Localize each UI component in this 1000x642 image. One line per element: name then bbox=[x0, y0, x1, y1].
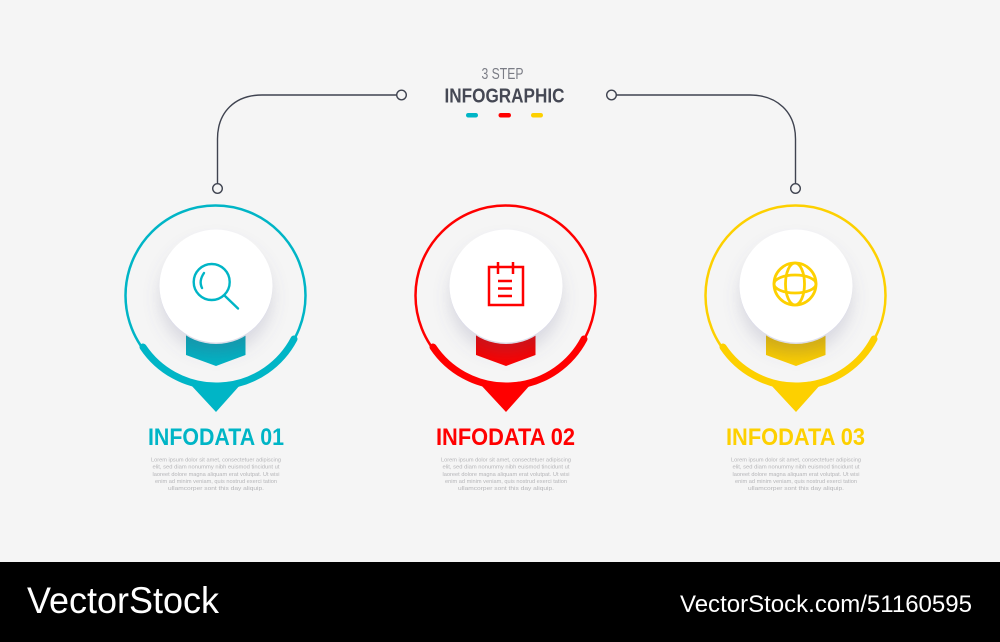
icon: notepad bbox=[489, 262, 523, 305]
title line: 3 step: 3 STEP bbox=[482, 66, 524, 83]
connector: right bbox=[607, 90, 800, 193]
ring bbox=[706, 206, 886, 386]
body text: elit, sed diam nonummy nibh euismod tincidunt ut bbox=[732, 464, 860, 470]
heading: INFODATA 03 bbox=[726, 424, 865, 451]
body text: enim ad minim veniam, quis nostrud exerci tation bbox=[735, 479, 857, 485]
heading: INFODATA 01 bbox=[148, 424, 284, 451]
footer id text: VectorStock.com/51160595 bbox=[680, 591, 972, 618]
ribbon bbox=[766, 335, 826, 366]
footer bar bbox=[0, 562, 1000, 642]
body text: Lorem ipsum dolor sit amet, consectetuer adipiscing bbox=[731, 458, 861, 464]
title colour dashes bbox=[466, 113, 543, 118]
body text: elit, sed diam nonummy nibh euismod tincidunt ut bbox=[152, 464, 280, 470]
thick arc bbox=[723, 339, 874, 386]
ribbon bbox=[186, 335, 246, 366]
body text: Lorem ipsum dolor sit amet, consectetuer adipiscing bbox=[441, 458, 571, 464]
footer logo text: VectorStock bbox=[27, 580, 219, 621]
pointer bbox=[480, 384, 531, 412]
thick arc bbox=[433, 339, 584, 386]
body text: Lorem ipsum dolor sit amet, consectetuer adipiscing bbox=[151, 458, 281, 464]
body text: elit, sed diam nonummy nibh euismod tincidunt ut bbox=[442, 464, 570, 470]
white disc bbox=[740, 231, 852, 344]
white disc bbox=[450, 231, 562, 344]
pointer bbox=[190, 384, 241, 412]
thick arc bbox=[143, 339, 294, 386]
pointer bbox=[770, 384, 821, 412]
white disc face bbox=[450, 230, 562, 342]
icon: magnifier bbox=[194, 264, 238, 308]
step 2 bbox=[416, 206, 596, 492]
body text bbox=[151, 458, 281, 492]
ring bbox=[416, 206, 596, 386]
step 3 bbox=[706, 206, 886, 492]
body text: ullamcorper sont this day aliquip. bbox=[748, 486, 844, 492]
heading: INFODATA 02 bbox=[436, 424, 575, 451]
body text: laoreet dolore magna aliquam erat volutpat. Ut wisi bbox=[732, 472, 860, 478]
body text: laoreet dolore magna aliquam erat volutpat. Ut wisi bbox=[442, 472, 570, 478]
body text: enim ad minim veniam, quis nostrud exerci tation bbox=[445, 479, 567, 485]
body text bbox=[731, 458, 861, 492]
step 1 bbox=[126, 206, 306, 492]
body text: laoreet dolore magna aliquam erat volutpat. Ut wisi bbox=[152, 472, 280, 478]
title line: infographic: INFOGRAPHIC bbox=[444, 86, 564, 108]
icon: globe bbox=[774, 263, 816, 305]
ring bbox=[126, 206, 306, 386]
body text: ullamcorper sont this day aliquip. bbox=[458, 486, 554, 492]
body text bbox=[441, 458, 571, 492]
white disc face bbox=[160, 230, 272, 342]
white disc face bbox=[740, 230, 852, 342]
title bbox=[444, 66, 564, 108]
body text: enim ad minim veniam, quis nostrud exerci tation bbox=[155, 479, 277, 485]
body text: ullamcorper sont this day aliquip. bbox=[168, 486, 264, 492]
ribbon bbox=[476, 335, 536, 366]
connector: left bbox=[213, 90, 406, 193]
white disc bbox=[160, 231, 272, 344]
